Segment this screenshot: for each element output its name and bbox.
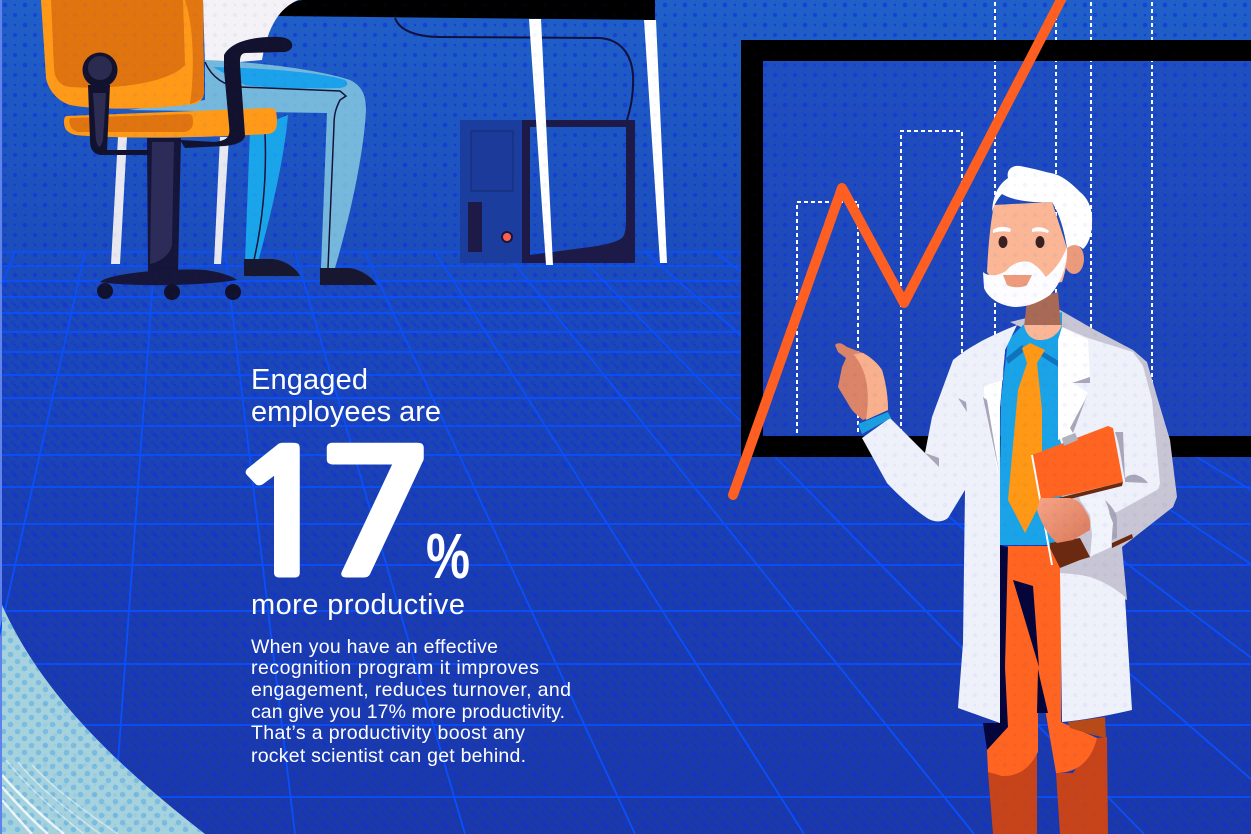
back leg: [245, 115, 288, 262]
presentation board: [741, 0, 1251, 457]
chair armrests: [88, 37, 292, 155]
clipboard lower cover: [1050, 534, 1133, 568]
navy shadow: [983, 545, 1010, 750]
desk top: [277, 0, 655, 20]
cable: [395, 18, 633, 120]
coat shading: [925, 377, 1148, 540]
cuff: [858, 412, 891, 434]
coat lower right panel: [1060, 573, 1132, 722]
more productive: more productive: [251, 589, 465, 621]
clip: [1062, 433, 1078, 446]
body copy: When you have an effective: [251, 636, 498, 658]
seated person: [128, 0, 377, 285]
mouth: [1003, 275, 1032, 287]
eyes: [998, 236, 1008, 248]
casters: [97, 283, 241, 300]
clipboard: [1032, 426, 1133, 568]
body copy: can give you 17% more productivity.: [251, 701, 565, 723]
beard: [983, 247, 1067, 307]
left edge strip: [0, 0, 2, 834]
leg outlines: [205, 62, 346, 268]
coat back: [1010, 310, 1177, 600]
clipboard face: [1032, 426, 1123, 500]
body copy: engagement, reduces turnover, and: [251, 679, 571, 701]
neck: [1024, 292, 1061, 327]
computer tower: [460, 120, 635, 263]
body copy: [251, 636, 571, 767]
chair back: [41, 0, 204, 109]
holding hand: [1037, 498, 1090, 543]
scientist: [835, 166, 1177, 834]
body copy: recognition program it improves: [251, 657, 539, 679]
thigh and front leg: [128, 60, 366, 268]
shirt: [999, 312, 1062, 545]
lower legs: [988, 737, 1108, 834]
face: [987, 202, 1067, 292]
hair: [992, 166, 1092, 249]
eyebrows: [993, 227, 1049, 233]
right sleeve cuff: [1080, 498, 1113, 557]
office chair: [41, 0, 292, 300]
corner swoosh: [2, 600, 207, 834]
upper legs: [987, 546, 1097, 776]
tie: [1008, 343, 1045, 533]
shirt: [203, 0, 298, 65]
big number 17: 17: [223, 430, 436, 601]
coat right: [1060, 327, 1160, 515]
coat left torso and sleeve: [862, 325, 1017, 723]
pointing hand: [835, 343, 888, 420]
dashed bar chart: [797, 0, 1152, 433]
desk legs: [529, 19, 667, 265]
ear: [1064, 244, 1084, 274]
trend line: [733, 0, 1064, 495]
lapels: [984, 327, 1090, 475]
intro line 2: employees are: [251, 396, 441, 428]
chair legs: [111, 137, 229, 264]
chair base: [100, 270, 237, 285]
chair post: [147, 138, 181, 272]
floor grid: [0, 252, 1251, 834]
coat shadow: [1068, 717, 1106, 738]
shoes: [244, 259, 377, 285]
collar: [1006, 345, 1060, 368]
chair seat: [64, 108, 277, 138]
desk: [277, 0, 667, 265]
crotch shadow: [1013, 580, 1048, 713]
body copy: rocket scientist can get behind.: [251, 745, 526, 767]
body copy: That’s a productivity boost any: [251, 722, 525, 744]
percent sign: %: [426, 520, 470, 592]
intro line 1: Engaged: [251, 364, 368, 396]
head: [983, 166, 1092, 307]
